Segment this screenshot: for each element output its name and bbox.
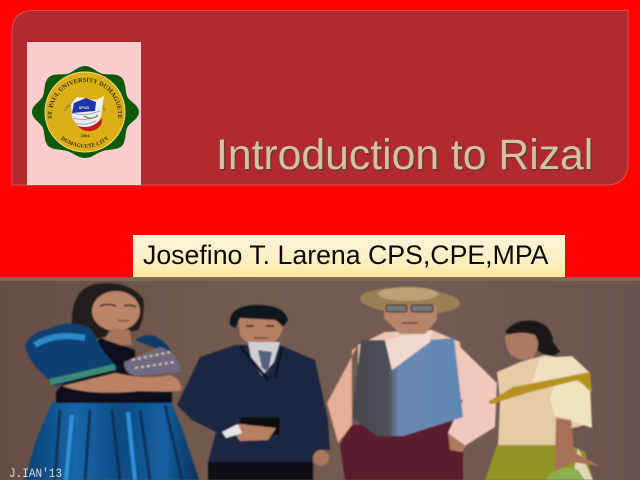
seal lettering	[48, 78, 122, 148]
presenter name: Josefino T. Larena CPS,CPE,MPA	[143, 240, 549, 270]
figure: woman in Filipiniana dress	[485, 320, 600, 480]
wall background	[0, 277, 640, 480]
seal lettering: CARITAS VERITAS SCIENTIA	[64, 98, 106, 112]
figure: woman in blue gown	[25, 283, 199, 480]
title text: Introduction to Rizal	[218, 132, 595, 180]
figure: man in straw hat	[327, 285, 497, 480]
presenter name box	[133, 235, 565, 277]
group photo	[0, 277, 640, 480]
figure: man in dark suit	[177, 305, 330, 480]
title text: Introduction to Rizal	[216, 131, 593, 179]
logo card	[27, 42, 141, 185]
seal lettering: 1904	[81, 134, 90, 138]
seal lettering: DUMAGUETE CITY	[60, 136, 108, 148]
seal lettering: ST. PAUL UNIVERSITY DUMAGUETE	[48, 78, 122, 118]
seal shield: SPUD	[79, 106, 90, 110]
university seal	[32, 66, 139, 158]
title panel	[12, 10, 628, 186]
